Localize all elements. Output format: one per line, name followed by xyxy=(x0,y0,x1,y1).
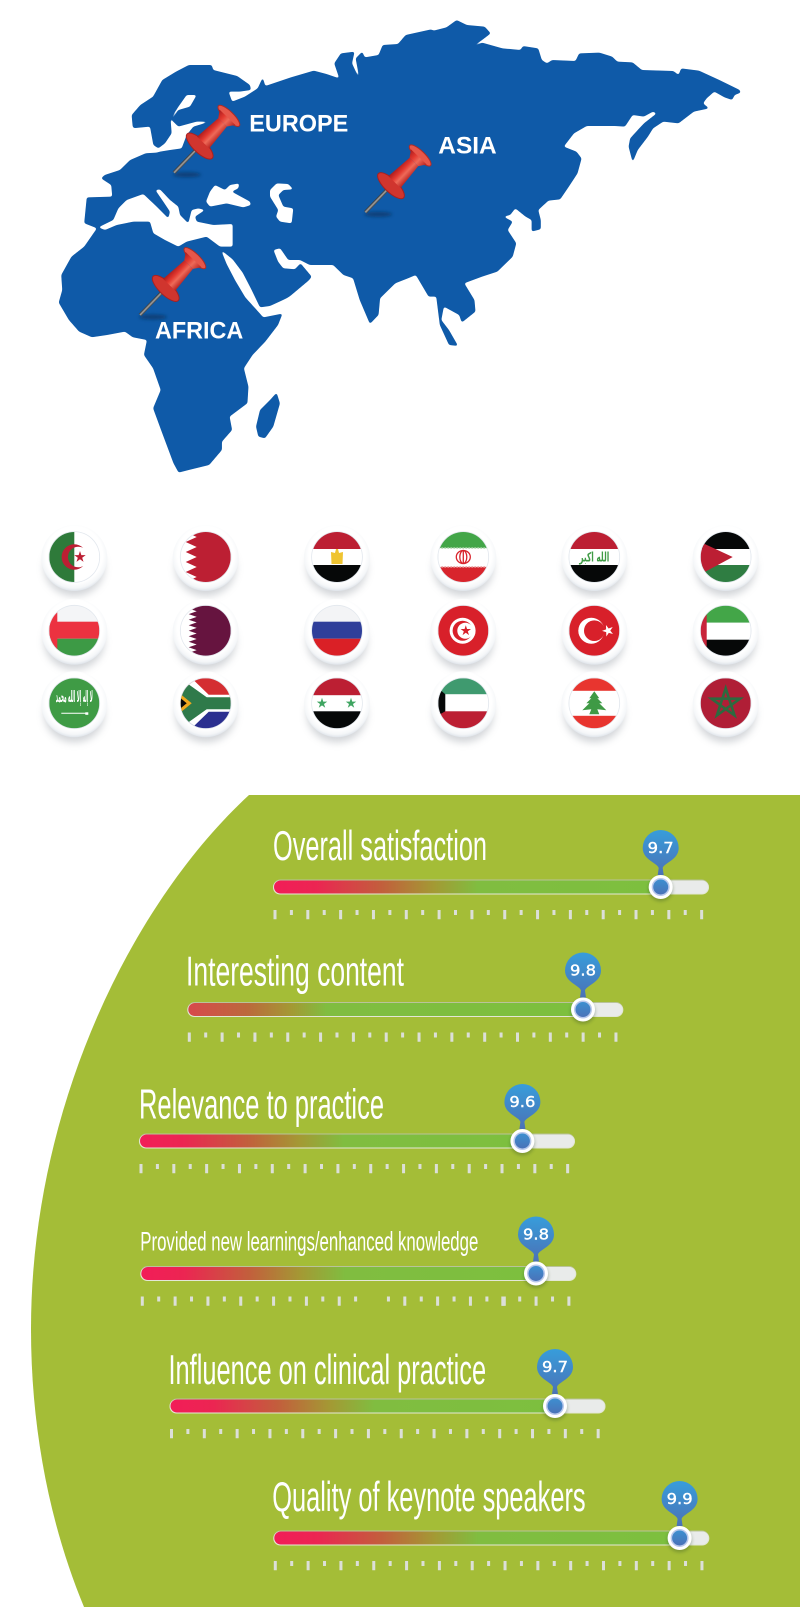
metric: Influence on clinical practice: 9.7 xyxy=(542,1358,568,1376)
metric: Influence on clinical practice xyxy=(168,1346,606,1434)
flags grid: لا إله إلا الله محمد xyxy=(56,687,93,706)
flags grid xyxy=(41,525,759,742)
flag: Kuwait xyxy=(430,671,496,742)
metric: Provided new learnings/enhanced knowledge: Provided new learnings/enhanced knowledge xyxy=(140,1227,478,1257)
metric: Provided new learnings/enhanced knowledge: 9.8 xyxy=(523,1226,549,1244)
flag: Oman xyxy=(41,599,107,670)
metric: Influence on clinical practice: Influence on clinical practice xyxy=(168,1346,486,1393)
flag: Palestine xyxy=(693,525,759,596)
flag: Bahrain xyxy=(173,525,239,596)
flag: Iraq: الله اكبر xyxy=(579,550,609,566)
map: Europe, Asia and Africa xyxy=(59,20,740,472)
flag: Egypt xyxy=(304,525,370,596)
metric: Interesting content xyxy=(186,948,623,1037)
label: Africa: AFRICA xyxy=(155,317,243,344)
metric: Quality of keynote speakers: Quality of keynote speakers xyxy=(272,1473,586,1520)
metric: Quality of keynote speakers xyxy=(272,1473,709,1566)
pin: Africa xyxy=(125,243,214,334)
flag: Turkey xyxy=(561,599,627,670)
metric: Interesting content: Interesting content xyxy=(186,948,404,994)
pin: Asia xyxy=(350,140,440,231)
metric: Provided new learnings/enhanced knowledge xyxy=(140,1216,576,1306)
flag: South Africa xyxy=(173,671,239,742)
panel background xyxy=(31,795,800,1607)
flag: United Arab Emirates xyxy=(693,599,759,670)
metric: Relevance to practice xyxy=(139,1081,575,1169)
flag: Iraq xyxy=(561,525,627,596)
flag: Algeria xyxy=(41,525,107,596)
metric: Overall satisfaction: 9.7 xyxy=(648,839,674,857)
flag: Qatar xyxy=(173,599,239,670)
label: Europe: EUROPE xyxy=(249,111,348,138)
pin: Europe xyxy=(159,100,248,191)
flag: Tunisia xyxy=(430,599,496,670)
label: Asia: ASIA xyxy=(438,132,497,159)
metric: Overall satisfaction xyxy=(273,822,709,915)
flag: Morocco xyxy=(693,671,759,742)
metric: Relevance to practice: Relevance to practice xyxy=(139,1081,384,1128)
flag: Russia xyxy=(304,599,370,670)
flag: Syria xyxy=(304,671,370,742)
flag: Iran xyxy=(430,525,496,596)
flag: Lebanon xyxy=(561,671,627,742)
panel: satisfaction scores xyxy=(31,795,800,1607)
metric: Overall satisfaction: Overall satisfaction xyxy=(273,822,487,869)
metric: Quality of keynote speakers: 9.9 xyxy=(667,1490,693,1508)
metric: Relevance to practice: 9.6 xyxy=(509,1093,535,1111)
metric: Interesting content: 9.8 xyxy=(570,962,596,980)
flag: Saudi Arabia xyxy=(41,671,107,742)
